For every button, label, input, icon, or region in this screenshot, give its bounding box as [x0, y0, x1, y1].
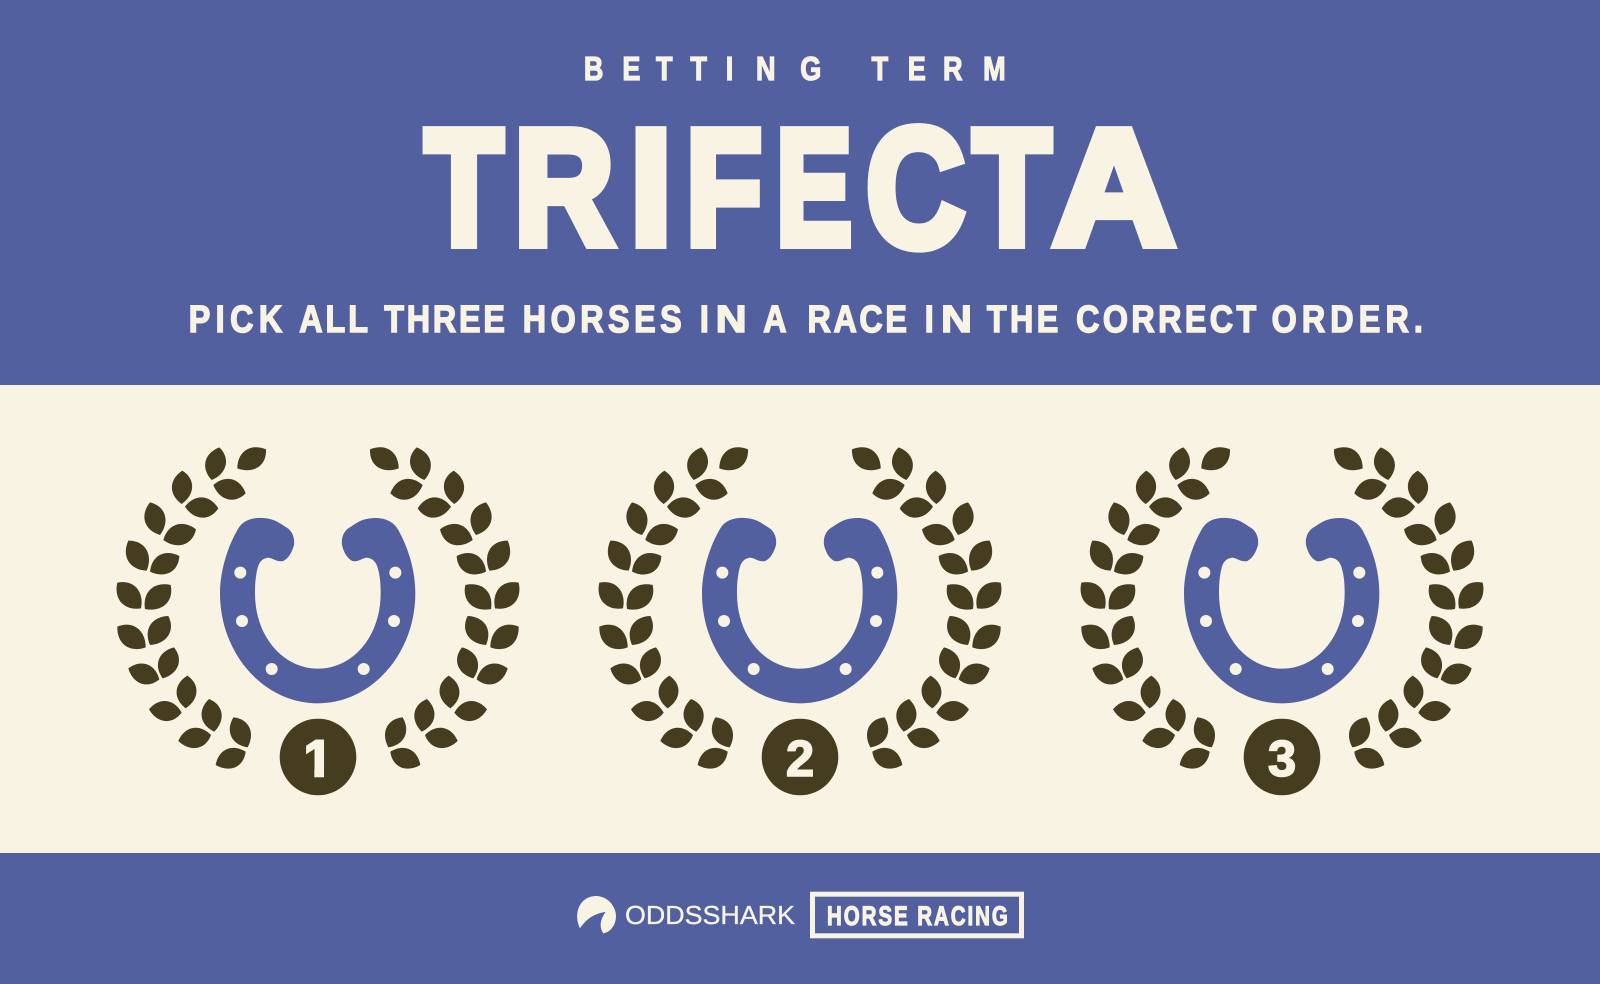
tagline: THE: [987, 299, 1058, 341]
middle panel background: [0, 385, 1600, 853]
title: trifecta: R: [514, 96, 614, 279]
laurel wreath 2: [592, 441, 1008, 774]
tagline: PICK: [189, 299, 283, 341]
tagline: N: [716, 299, 747, 341]
top banner background: [0, 0, 1600, 385]
badge: horse racing: HORSE RACING: [827, 901, 1008, 932]
title: trifecta: I: [630, 96, 672, 279]
number badge 3: 3: [1268, 730, 1296, 787]
title: trifecta: A: [1053, 96, 1175, 279]
panel: third place: [1074, 441, 1490, 795]
title: trifecta: E: [776, 96, 852, 279]
title: trifecta: T: [973, 96, 1051, 279]
tagline: I: [700, 299, 709, 341]
tagline: THREE: [384, 299, 505, 341]
number badge 2: 2: [786, 730, 814, 787]
tagline: HORSES: [523, 299, 682, 341]
number badge 2: [762, 719, 838, 795]
icon: shark fin logo: [577, 896, 616, 933]
tagline: A: [763, 299, 787, 341]
number badge 3: [1244, 719, 1320, 795]
number badge 1: 1: [304, 730, 332, 787]
horseshoe 3: [1184, 518, 1379, 703]
title: trifecta: T: [425, 96, 503, 279]
badge: horse racing: [812, 894, 1022, 936]
horseshoe 2: [702, 518, 897, 703]
tagline: RACE: [808, 299, 907, 341]
panel: first place: [110, 441, 526, 795]
tagline: I: [925, 299, 934, 341]
tagline: N: [941, 299, 972, 341]
tagline: ORDER.: [1272, 299, 1423, 341]
eyebrow heading: betting term: BETTING TERM: [584, 52, 1006, 88]
tagline: ALL: [299, 299, 368, 341]
horseshoe 1: [220, 518, 415, 703]
panel: second place: [592, 441, 1008, 795]
laurel wreath 1: [110, 441, 526, 774]
title: trifecta: C: [866, 93, 965, 282]
number badge 1: [280, 719, 356, 795]
footer logo: [577, 894, 1022, 936]
laurel wreath 3: [1074, 441, 1490, 774]
brand name: oddsshark: ODDSSHARK: [625, 900, 796, 930]
footer banner background: [0, 853, 1600, 984]
tagline: CORRECT: [1076, 299, 1257, 341]
title: trifecta: F: [686, 96, 762, 279]
